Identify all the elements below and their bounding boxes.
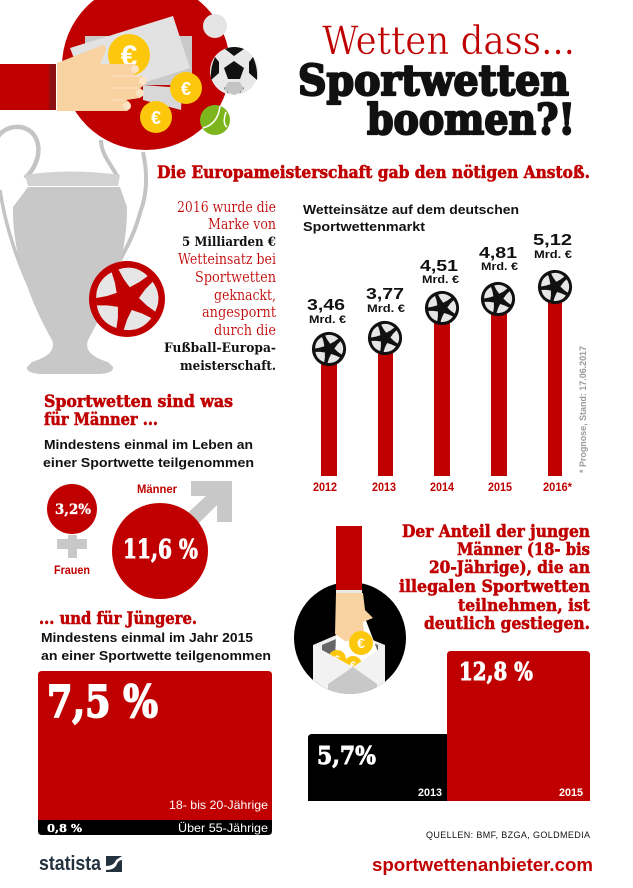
female symbol: 3,2 %: [47, 484, 97, 577]
text block: 5 Milliarden: angespornt: [202, 303, 276, 321]
subheading: participation in 2015: [41, 630, 271, 663]
text block: illegal betting: teilnehmen, ist: [458, 596, 590, 616]
bar chart: young men illegal betting: 5,7%: [317, 741, 376, 770]
text block: 5 Milliarden: [164, 198, 276, 374]
text block: 5 Milliarden: 5 Milliarden €: [182, 235, 276, 250]
text block: 5 Milliarden: durch die: [214, 321, 276, 339]
illustration: hand dropping coins into envelope: [294, 526, 406, 700]
bar chart: betting stakes: 2012: [313, 482, 337, 494]
area chart: age groups: Über 55-Jährige: [178, 821, 268, 835]
text block: illegal betting: deutlich gestiegen.: [424, 614, 590, 634]
title: Wetten dass...: [322, 19, 575, 64]
text block: 5 Milliarden: Marke von: [208, 215, 276, 233]
illustration: hand dropping coins into envelope: €: [350, 660, 356, 672]
subheading: lifetime participation: Mindestens einmal im Leben an: [44, 437, 253, 452]
text block: illegal betting: illegalen Sportwetten: [399, 577, 590, 597]
female symbol: 3,2 %: Frauen: [54, 563, 90, 577]
text block: 5 Milliarden: meisterschaft.: [180, 359, 276, 374]
logo: statista: statista: [39, 853, 102, 875]
bar chart: betting stakes: 2015: [488, 482, 513, 494]
illustration: hand with money and sports balls: €: [181, 79, 191, 99]
text block: illegal betting: Der Anteil der jungen: [402, 522, 590, 542]
bar chart: betting stakes: 4,51: [420, 258, 458, 275]
male symbol: 11,6 %: Männer: [137, 482, 177, 496]
website url: sportwettenanbieter.com: [372, 855, 593, 875]
illustration: hand dropping coins into envelope: €: [334, 654, 340, 666]
text block: illegal betting: [399, 522, 590, 634]
female symbol: 3,2 %: 3,2%: [55, 502, 91, 518]
bar chart: betting stakes: Mrd. €: [309, 314, 346, 326]
bar chart: betting stakes: Mrd. €: [422, 274, 459, 286]
chart title: Wetteinsätze auf dem deutschen: [303, 202, 519, 217]
bar chart: betting stakes: Mrd. €: [367, 303, 405, 315]
bar chart: betting stakes: 2013: [372, 482, 396, 494]
title: Sportwetten: [298, 56, 569, 105]
bar chart: young men illegal betting: 2013: [418, 787, 442, 799]
illustration: hand with money and sports balls: [0, 0, 258, 150]
bar chart: young men illegal betting: [308, 651, 590, 801]
area chart: age groups: [38, 671, 272, 835]
bar chart: betting stakes: Mrd. €: [534, 249, 572, 261]
bar chart: betting stakes: 3,77: [366, 286, 404, 303]
illustration: hand with money and sports balls: €: [121, 40, 138, 73]
male symbol: 11,6 %: 11,6 %: [123, 535, 198, 565]
title: boomen?!: [367, 95, 575, 144]
heading: Männer: für Männer ...: [44, 410, 158, 430]
illustration: trophy: [0, 127, 146, 374]
title: [298, 19, 575, 144]
text block: 5 Milliarden: Fußball-Europa-: [164, 341, 276, 356]
footnote: forecast: * Prognose, Stand: 17.06.2017: [578, 346, 588, 473]
text block: illegal betting: Männer (18- bis: [457, 540, 590, 560]
text block: 5 Milliarden: Wetteinsatz bei: [178, 250, 276, 268]
text block: illegal betting: 20-Jährige), die an: [429, 558, 590, 578]
male symbol: 11,6 %: [112, 481, 232, 599]
text block: 5 Milliarden: geknackt,: [214, 286, 276, 304]
text block: 5 Milliarden: Sportwetten: [195, 268, 276, 286]
bar chart: betting stakes: 4,81: [479, 245, 517, 262]
heading: Männer: [44, 392, 233, 430]
chart title: [303, 202, 519, 234]
heading: Männer: Sportwetten sind was: [44, 392, 233, 412]
bar chart: betting stakes: 5,12: [533, 232, 572, 249]
bar chart: young men illegal betting: 12,8 %: [459, 657, 533, 686]
area chart: age groups: 18- bis 20-Jährige: [169, 798, 268, 812]
bar chart: betting stakes: [307, 232, 573, 494]
area chart: age groups: 7,5 %: [47, 677, 158, 728]
bar chart: young men illegal betting: 2015: [559, 787, 583, 799]
illustration: hand dropping coins into envelope: €: [357, 635, 365, 651]
subheading: lifetime participation: einer Sportwette teilgenommen: [43, 455, 254, 470]
subheading: lifetime participation: [43, 437, 254, 470]
heading: Jüngere: ... und für Jüngere.: [39, 609, 197, 629]
chart title: Sportwettenmarkt: [303, 219, 426, 234]
subheading: participation in 2015: Mindestens einmal im Jahr 2015: [41, 630, 253, 645]
bar chart: betting stakes: Mrd. €: [481, 261, 518, 273]
subheading: participation in 2015: an einer Sportwette teilgenommen: [41, 648, 271, 663]
star football: [89, 261, 165, 337]
illustration: hand with money and sports balls: €: [151, 108, 161, 128]
area chart: age groups: 0,8 %: [47, 821, 82, 835]
text block: 5 Milliarden: 2016 wurde die: [177, 198, 276, 216]
bar chart: betting stakes: 2014: [430, 482, 455, 494]
heading: Europameisterschaft: Die Europameisterschaft gab den nötigen Anstoß.: [157, 163, 590, 183]
bar chart: betting stakes: 2016*: [543, 482, 573, 494]
sources: QUELLEN: BMF, BZGA, GOLDMEDIA: [426, 830, 590, 840]
bar chart: betting stakes: 3,46: [307, 297, 345, 314]
